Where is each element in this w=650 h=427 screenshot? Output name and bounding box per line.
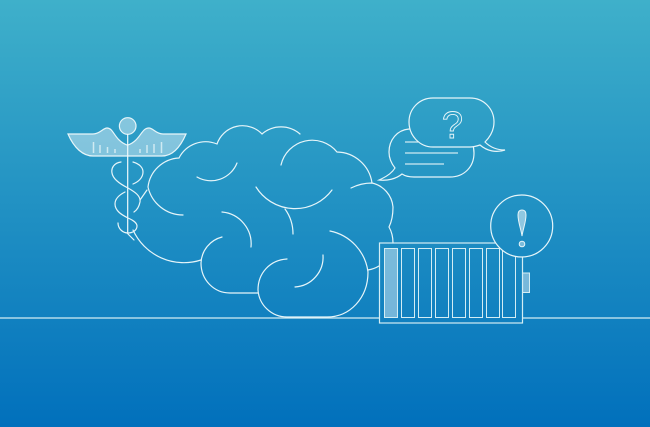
ground line [0, 317, 650, 319]
icon: brain outline [133, 126, 393, 317]
back speech bubble [379, 129, 474, 180]
question mark: ? [442, 105, 463, 147]
icon: speech bubbles [379, 98, 505, 180]
charged battery cell [384, 248, 398, 318]
caduceus wings [68, 128, 186, 156]
wing feather bars [94, 142, 162, 153]
caduceus snakes [112, 162, 147, 240]
icon: battery [380, 243, 530, 323]
battery casing [380, 243, 522, 323]
message lines [405, 142, 458, 164]
front speech bubble [409, 98, 505, 151]
caduceus staff [127, 134, 129, 234]
icon: alert circle with exclamation mark [491, 195, 553, 257]
empty battery cells [402, 248, 516, 318]
battery terminal [522, 273, 530, 292]
caduceus orb [119, 118, 136, 134]
exclamation mark [518, 210, 526, 236]
icon: caduceus medical symbol [68, 118, 186, 240]
